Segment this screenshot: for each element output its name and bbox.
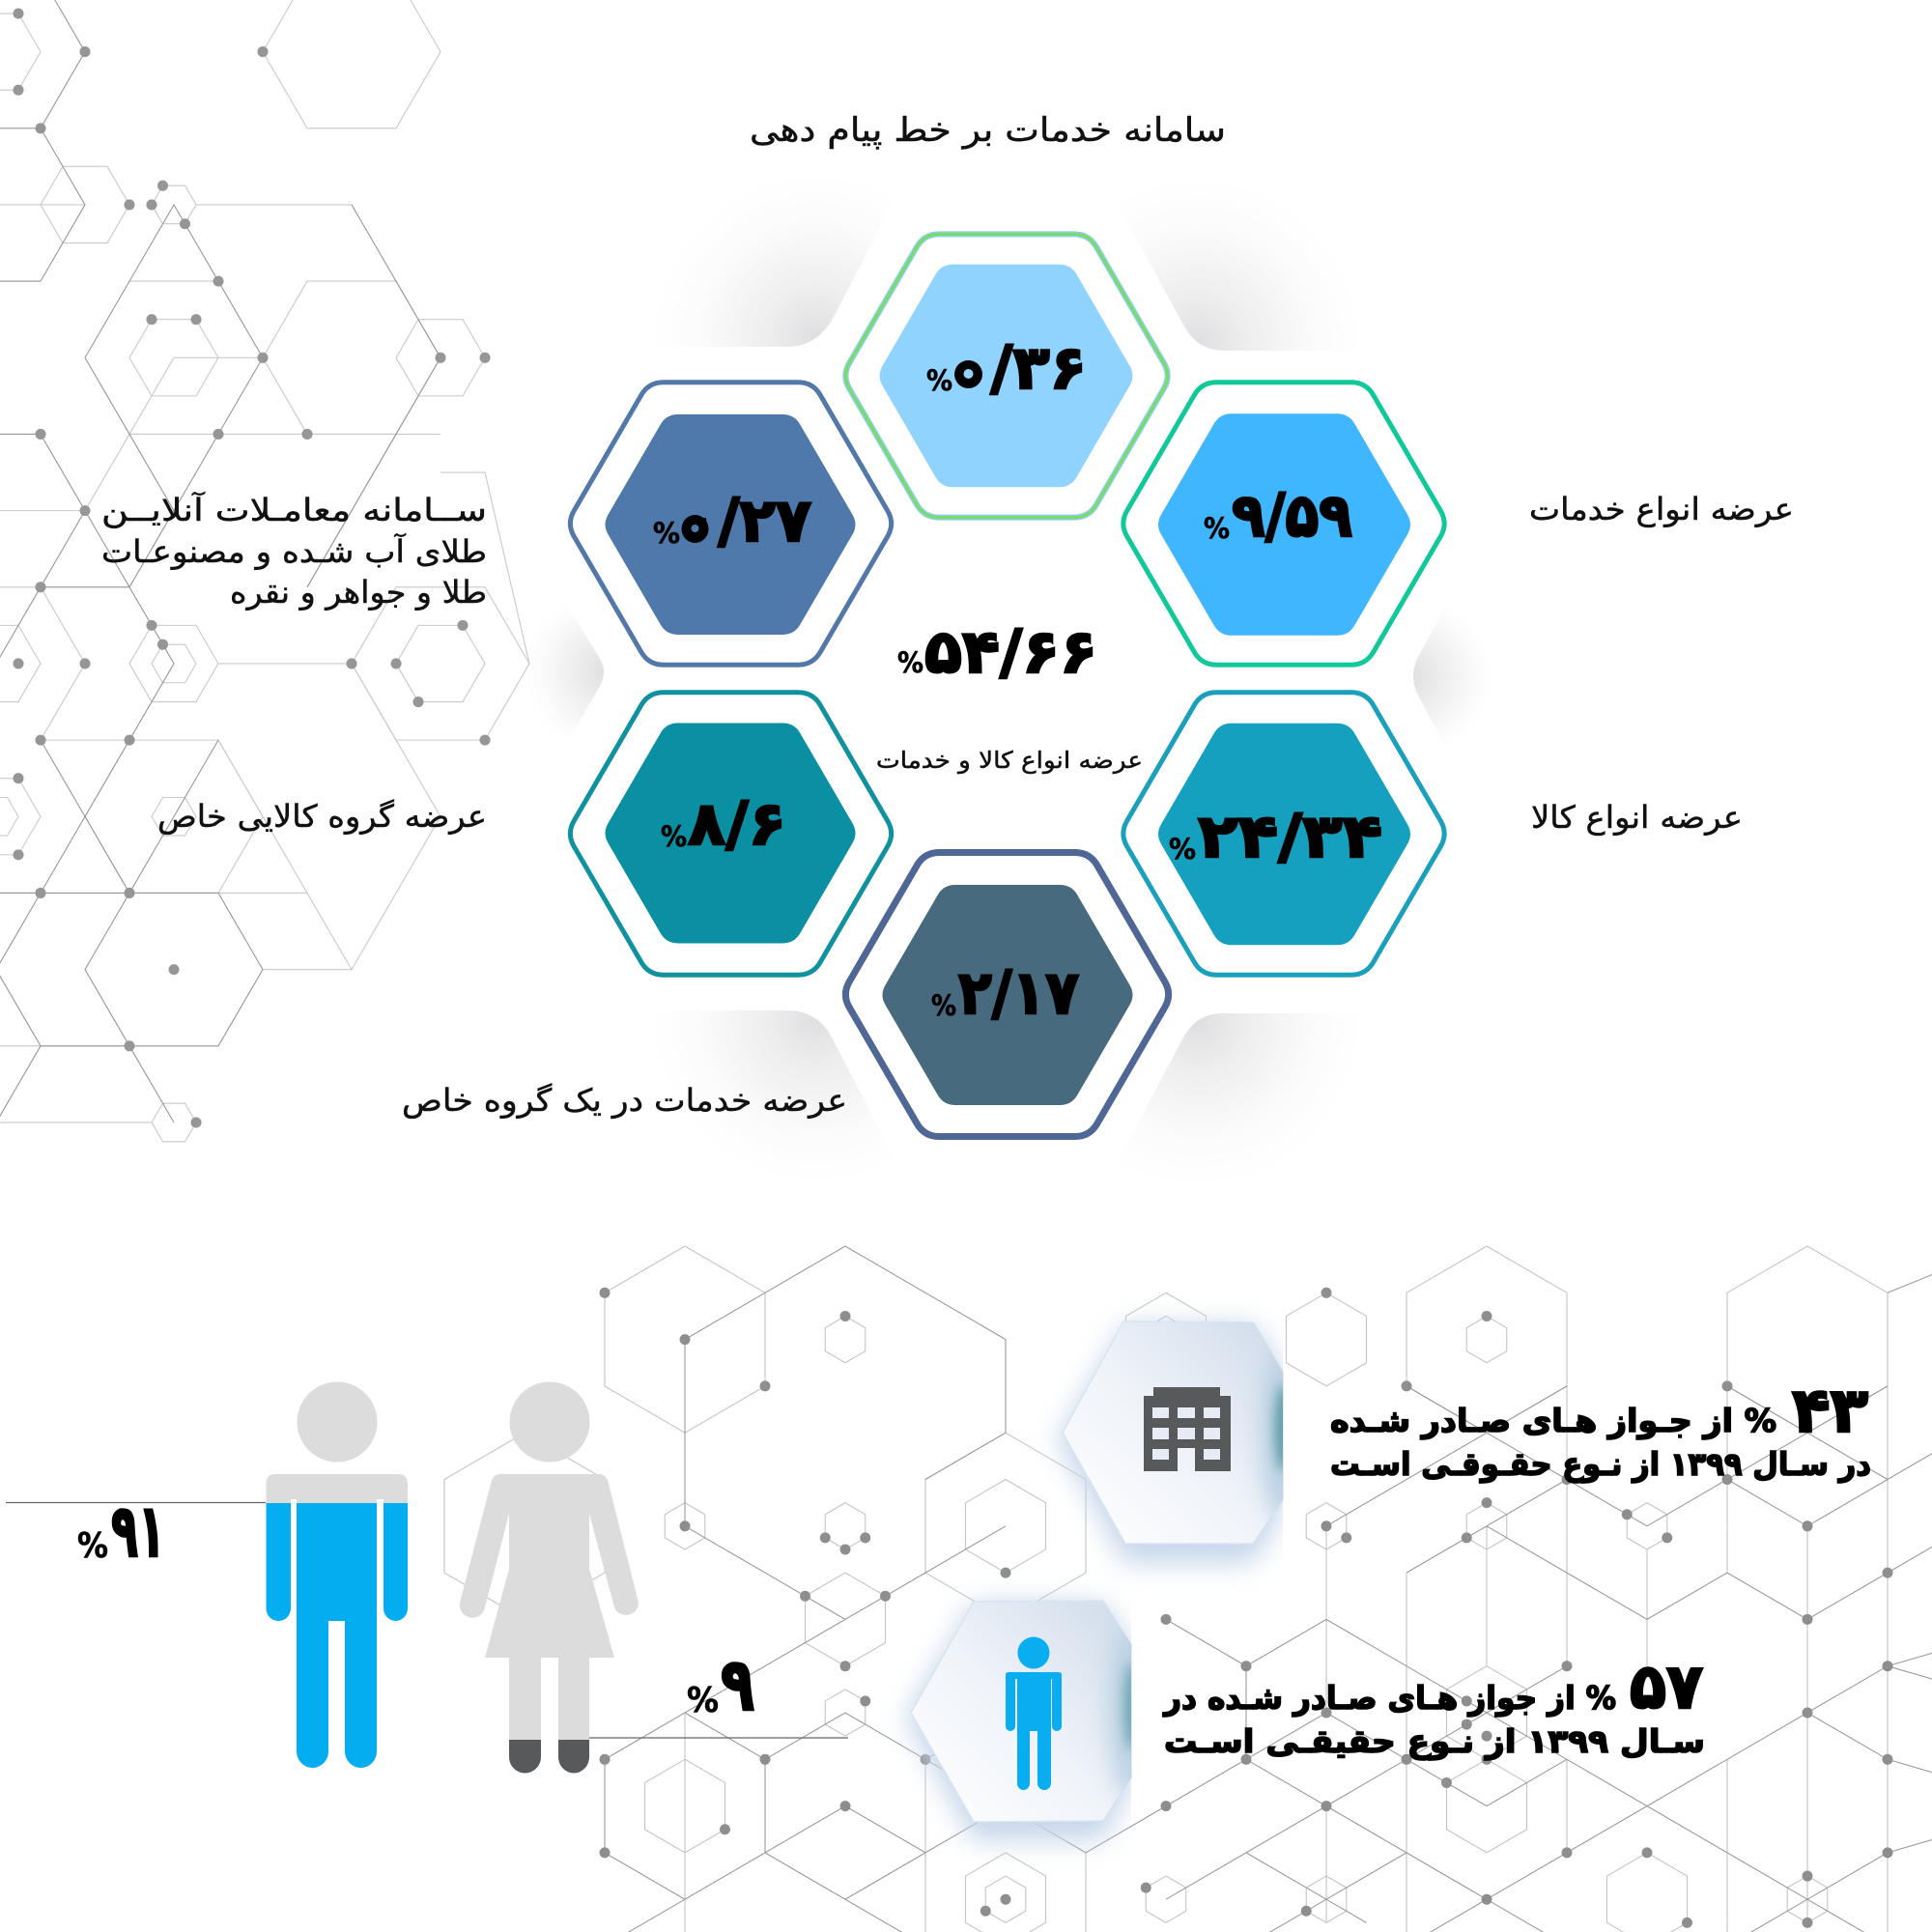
text: 57 percent natural: ۵۷ (1630, 1652, 1703, 1723)
hexagon: top, 0/36 (845, 234, 1168, 518)
hexagon: upper right, 9/59: ۹/۵۹ (1232, 480, 1352, 551)
center figure: 54/66: ۵۴/۶۶ (924, 616, 1097, 687)
icon: person (1006, 1636, 1062, 1790)
background hexagon network: bottom right (444, 1246, 1932, 1932)
label: specific goods group: عرضه گروه کالایی خاص (157, 798, 487, 835)
hexagon: bottom, 2/17: % (931, 989, 956, 1022)
center label: عرضه انواع کالا و خدمات (876, 747, 1143, 774)
background hexagon network: top left (0, 0, 529, 1142)
label: online gold trading system (101, 491, 487, 611)
man pictogram (267, 1381, 408, 1768)
hexagon: upper left, 0/27: % (653, 517, 680, 550)
hexagon: lower left, 8/6: % (661, 820, 687, 853)
text: 43 percent legal: % از جـواز هـای صـادر شـده (1330, 1402, 1776, 1440)
hexagon: upper left, 0/27 (570, 383, 892, 665)
label: goods: عرضه انواع کالا (1531, 799, 1743, 836)
hexagon: lower right, 24/34: % (1169, 833, 1196, 866)
text: 43 percent legal: در سـال ۱۳۹۹ از نـوع حقـوقـی اسـت (1330, 1445, 1871, 1484)
hexagon: lower right, 24/34 (1123, 693, 1444, 975)
label: online gold trading system: ســامانه معامـلات آنلایــن (101, 491, 487, 528)
label: online gold trading system: طلا و جواهر و نقره (230, 574, 487, 611)
leader line and value: 9 percent women: % (687, 1681, 719, 1720)
icon: building (1144, 1387, 1231, 1471)
hexagon: bottom, 2/17 (845, 852, 1169, 1137)
text: 57 percent natural: سـال ۱۳۹۹ از نـوع حقیقـی اسـت (1164, 1722, 1705, 1761)
text: 57 percent natural (1162, 1652, 1705, 1761)
leader line and value: 9 percent women (589, 1641, 848, 1738)
hexagon: top, 0/36: % (926, 364, 952, 397)
hexagon: lower left, 8/6 (570, 693, 892, 975)
text: 57 percent natural: % از جواز هـای صـادر شـده در (1162, 1679, 1616, 1718)
leader line and value: 91 percent men: ۹۱ (111, 1488, 165, 1574)
woman pictogram (460, 1381, 639, 1774)
leader line and value: 9 percent women: ۹ (721, 1641, 754, 1727)
text: 43 percent legal: ۴۳ (1792, 1376, 1868, 1447)
leader line and value: 91 percent men (6, 1488, 266, 1574)
leader line and value: 91 percent men: % (77, 1526, 108, 1566)
soft shadow shapes around the hexagon cluster (493, 174, 1515, 1183)
hexagon: top, 0/36: ۰/۳۶ (953, 332, 1087, 403)
card: natural person with person icon (906, 1601, 1152, 1840)
label: services: عرضه انواع خدمات (1529, 491, 1794, 527)
hexagon: lower right, 24/34: ۲۴/۳۴ (1198, 801, 1382, 871)
center figure: 54/66: % (897, 646, 923, 679)
title: سامانه خدمات بر خط پیام دهی (750, 111, 1226, 150)
hexagon: upper right, 9/59: % (1204, 512, 1230, 545)
label: services in a specific group: عرضه خدمات در یک گروه خاص (402, 1082, 847, 1119)
text: 43 percent legal (1330, 1376, 1871, 1484)
hexagon: upper right, 9/59 (1123, 383, 1444, 665)
hexagon: upper left, 0/27: ۰/۲۷ (682, 485, 811, 555)
hexagon: lower left, 8/6: ۸/۶ (688, 788, 786, 859)
hexagon: bottom, 2/17: ۲/۱۷ (958, 957, 1079, 1028)
label: online gold trading system: طلای آب شـده و مصنوعـات (101, 532, 487, 570)
card: legal entity with building icon (1058, 1321, 1304, 1563)
